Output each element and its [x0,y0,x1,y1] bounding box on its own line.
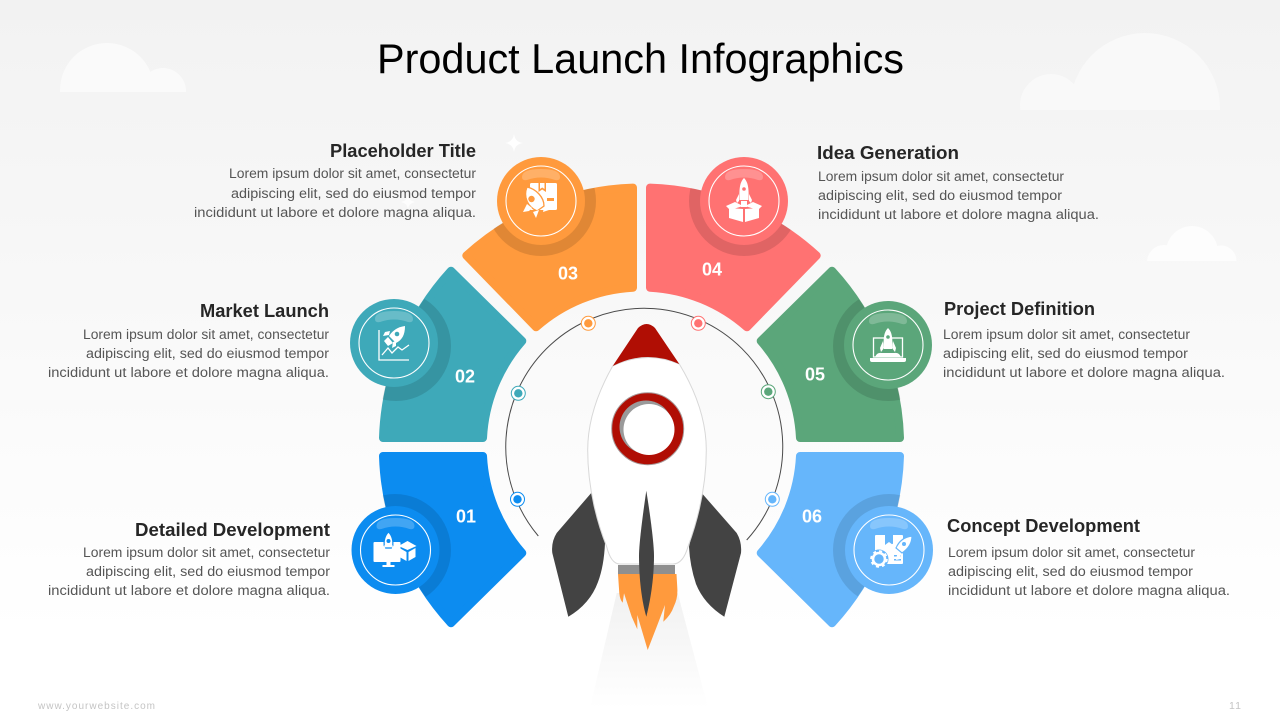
text block: Project Definition: Lorem ipsum dolor sit amet, consectetur [943,327,1191,342]
segment shadow 05 [833,300,900,401]
text block: Idea Generation: Lorem ipsum dolor sit amet, consectetur [818,169,1065,184]
left fin [552,492,605,617]
badge 06 [845,506,933,594]
segment shadow 04 [689,188,791,256]
text block: Detailed Development: Detailed Development [135,520,330,540]
text block: Detailed Development [48,520,331,598]
orbit arc [506,308,783,540]
porthole [612,393,684,465]
text block: Concept Development: Lorem ipsum dolor sit amet, consectetur [948,545,1196,560]
text block: Market Launch: adipiscing elit, sed do eiusmod tempor [86,346,330,361]
center fin [639,491,654,617]
orbit dot: light blue [765,492,779,506]
sparkle star [505,134,523,152]
text block: Placeholder Title: adipiscing elit, sed do eiusmod tempor [231,186,477,201]
title: Product Launch Infographics [377,35,904,82]
text block: Concept Development [947,516,1230,598]
badge 02 [350,299,438,387]
panel: segment 01 [339,456,522,623]
icon: rocket and laptop [870,328,906,362]
number 04: 04 [702,260,722,280]
badge 01 [352,506,440,594]
engine band [618,565,675,574]
text block: Market Launch: Market Launch [200,301,329,321]
text block: Idea Generation: incididunt ut labore et dolore magna aliqua. [818,207,1099,222]
text block: Placeholder Title: Placeholder Title [330,141,476,161]
text block: Detailed Development: incididunt ut labore et dolore magna aliqua. [48,583,330,598]
text block: Market Launch [48,301,330,380]
panel: segment 05 [761,271,943,438]
text block: Concept Development: adipiscing elit, sed do eiusmod tempor [948,564,1194,579]
panel: segment 06 [761,456,945,623]
text block: Detailed Development: Lorem ipsum dolor sit amet, consectetur [83,545,331,560]
rocket body [588,357,706,564]
text block: Placeholder Title [194,141,477,220]
footer: website: www.yourwebsite.com [37,701,155,712]
orbit dot: coral [691,316,705,330]
text block: Idea Generation [817,143,1099,222]
orbit dot: orange [581,316,595,330]
cloud: right small [1147,226,1236,279]
text block: Market Launch: Lorem ipsum dolor sit amet, consectetur [83,327,330,342]
text block: Market Launch: incididunt ut labore et dolore magna aliqua. [48,365,329,380]
text block: Placeholder Title: Lorem ipsum dolor sit amet, consectetur [229,166,477,181]
sparkle star: faint [401,195,415,209]
text block: Idea Generation: adipiscing elit, sed do eiusmod tempor [818,188,1063,203]
icon: rocket, screen and boxes [374,532,416,567]
cloud: top right [1020,33,1220,183]
footer: page number: 11 [1229,700,1241,712]
number 03: 03 [558,264,578,284]
right fin [689,493,741,617]
segment shadow 02 [382,299,451,401]
number 06: 06 [802,506,822,526]
badge 05 [844,301,932,389]
text block: Concept Development: incididunt ut labore et dolore magna aliqua. [948,583,1230,598]
icon: rocket and parcel [523,183,557,218]
text block: Idea Generation: Idea Generation [817,143,959,163]
badge 04 [700,157,788,245]
icon: rocket and open box [726,178,762,222]
icon: parcel, gear and rocket [870,535,912,568]
badge 03 [497,157,585,245]
text block: Placeholder Title: incididunt ut labore et dolore magna aliqua. [194,205,476,220]
panel: segment 02 [341,271,522,438]
number 02: 02 [455,366,475,386]
rocket exhaust trail [590,593,708,708]
panel: segment 04 [650,146,817,327]
segment shadow 01 [382,494,451,597]
cloud: top left [60,43,186,137]
orbit dot: blue [510,492,524,506]
icon: rocket and growth chart [379,326,409,360]
flame [618,574,677,650]
rocket [552,324,741,650]
text block: Detailed Development: adipiscing elit, sed do eiusmod tempor [86,564,331,579]
orbit dot: teal [511,386,525,400]
number 05: 05 [805,364,825,384]
segment shadow 06 [833,494,900,596]
text block: Concept Development: Concept Development [947,516,1140,536]
nose cone [613,324,679,366]
segment shadow 03 [494,188,596,256]
number 01: 01 [456,506,476,526]
text block: Project Definition: incididunt ut labore et dolore magna aliqua. [943,365,1225,380]
panel: segment 03 [466,146,633,327]
text block: Project Definition: adipiscing elit, sed do eiusmod tempor [943,346,1189,361]
text block: Project Definition: Project Definition [944,299,1095,319]
text block: Project Definition [943,299,1225,380]
orbit dot: green [761,385,775,399]
